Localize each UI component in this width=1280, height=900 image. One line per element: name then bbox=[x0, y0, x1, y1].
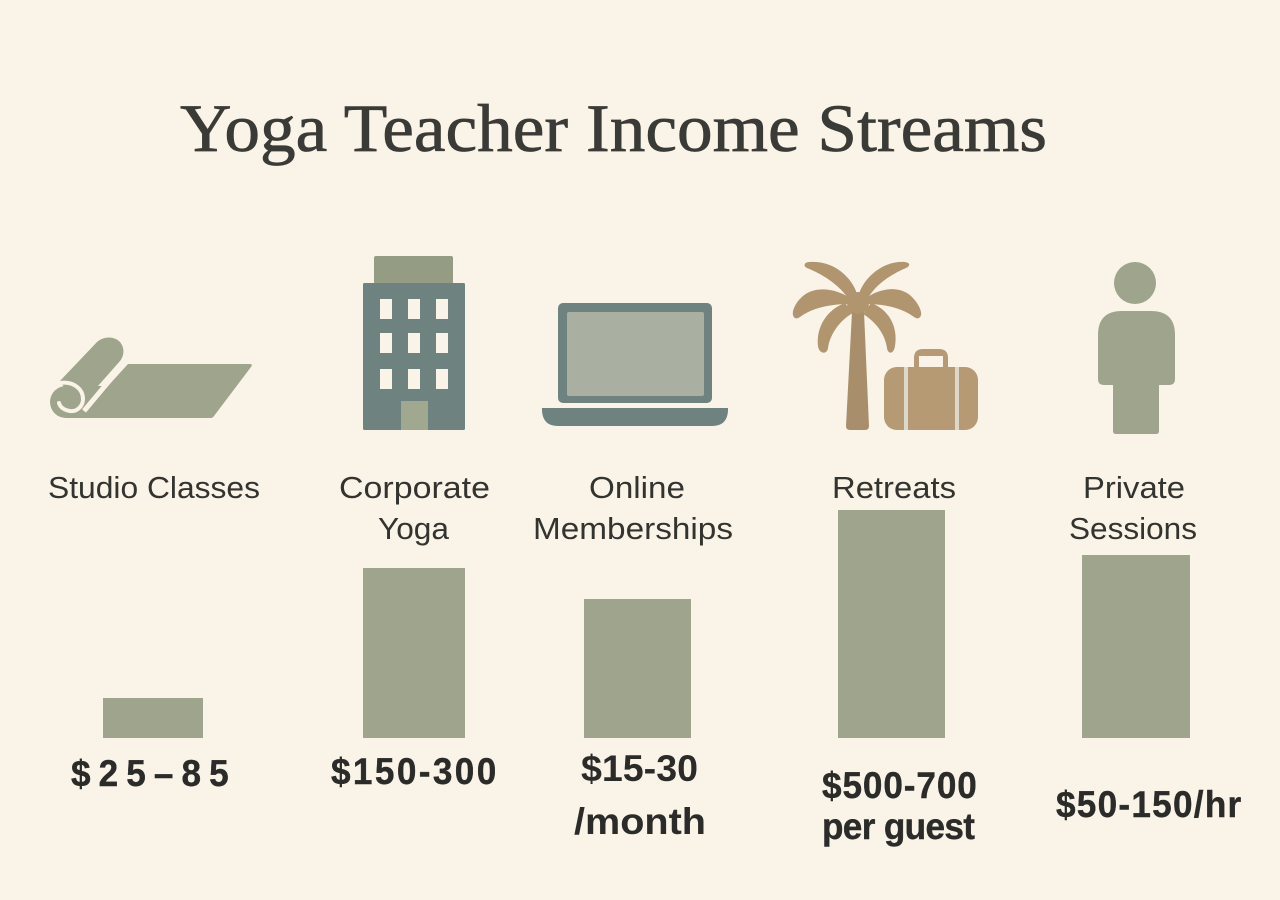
value: $500-700 per guest bbox=[822, 764, 977, 847]
value: $15-30 /month: $15-30 bbox=[581, 748, 698, 789]
column: corporate yoga bbox=[331, 256, 496, 792]
column: online memberships bbox=[533, 303, 733, 842]
label: corporate yoga: Yoga bbox=[378, 511, 450, 546]
value: $500-700 per guest: $500-700 bbox=[822, 764, 977, 806]
bar: retreats bbox=[838, 510, 945, 738]
value: $15-30 /month bbox=[574, 748, 706, 842]
label: studio classes: Studio Classes bbox=[48, 470, 260, 505]
icon: laptop bbox=[542, 303, 728, 426]
label: private sessions bbox=[1069, 470, 1197, 546]
bar: online memberships bbox=[584, 599, 691, 738]
label: corporate yoga bbox=[339, 470, 490, 546]
label: private sessions: Private bbox=[1083, 470, 1185, 505]
label: online memberships bbox=[533, 470, 733, 546]
label: retreats: Retreats bbox=[832, 470, 956, 505]
value: $50-150/hr: $50-150/hr bbox=[1056, 783, 1241, 825]
icon: office building bbox=[363, 256, 465, 430]
label: online memberships: Online bbox=[589, 470, 685, 505]
value: $150-300: $150-300 bbox=[331, 750, 496, 792]
bar: studio classes bbox=[103, 698, 203, 738]
column: studio classes bbox=[48, 338, 260, 794]
label: online memberships: Memberships bbox=[533, 511, 733, 546]
value: $25–85: $25–85 bbox=[71, 752, 229, 794]
icon: person bbox=[1098, 262, 1175, 434]
icon: palm tree and suitcase bbox=[793, 262, 978, 430]
title: Yoga Teacher Income Streams bbox=[180, 90, 1047, 166]
label: corporate yoga: Corporate bbox=[339, 470, 490, 505]
value: $15-30 /month: /month bbox=[574, 801, 706, 842]
bar: corporate yoga bbox=[363, 568, 465, 738]
value: $500-700 per guest: per guest bbox=[822, 805, 975, 847]
label: private sessions: Sessions bbox=[1069, 511, 1197, 546]
icon: rolled yoga mat bbox=[50, 338, 252, 418]
bar: private sessions bbox=[1082, 555, 1190, 738]
column: private sessions bbox=[1056, 262, 1241, 825]
column: retreats bbox=[793, 262, 978, 847]
